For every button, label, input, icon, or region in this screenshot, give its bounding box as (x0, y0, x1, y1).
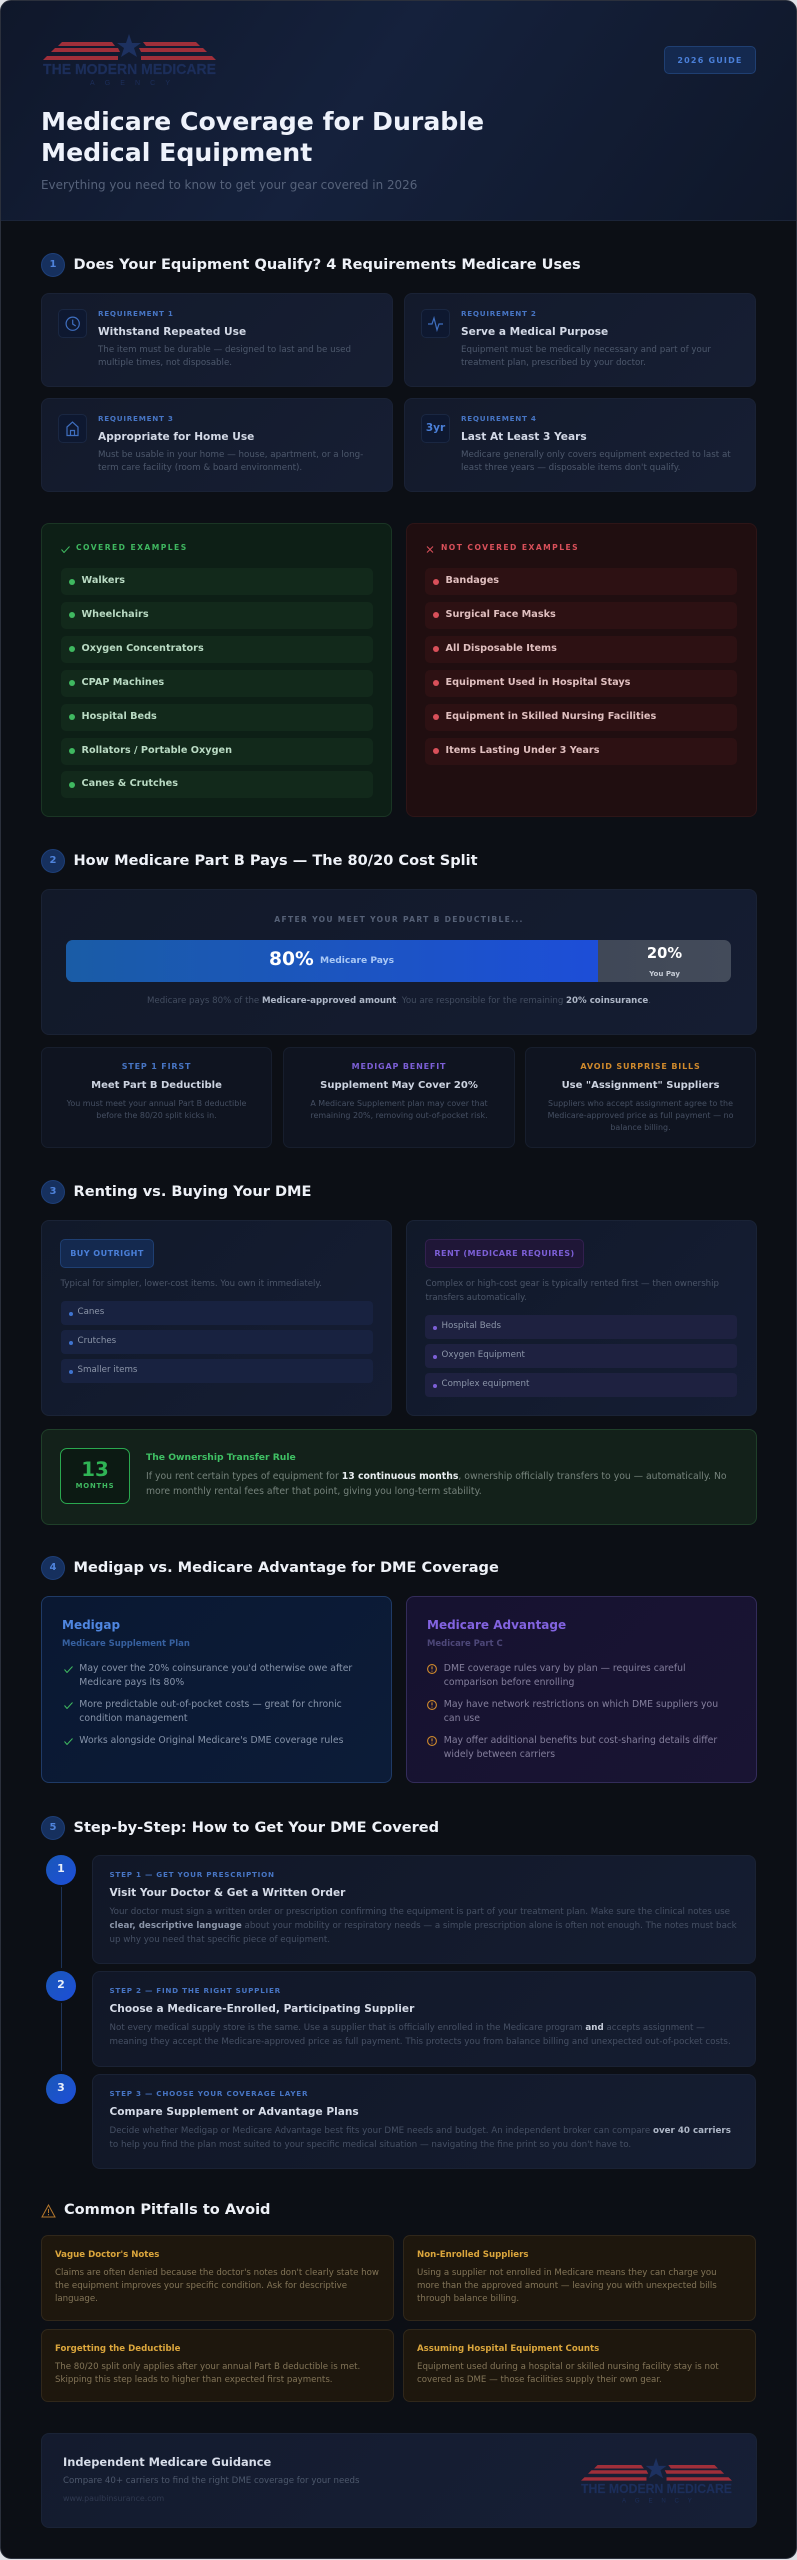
pitfall card: language. (55, 2294, 98, 2304)
rule text: more monthly rental fees after that point, giving you long-term stability. (146, 1486, 482, 1497)
requirement card 2 (404, 293, 756, 387)
title: Medicare Coverage for Durable (41, 107, 484, 136)
bar segment: 20%: 20% (647, 945, 682, 962)
list item: Hospital Beds (442, 1321, 501, 1331)
step marker 3: 3 (57, 2081, 65, 2094)
list item (61, 568, 373, 595)
step card 3: STEP 3 — CHOOSE YOUR COVERAGE LAYER (110, 2089, 308, 2098)
panel: cost split (41, 889, 757, 1035)
list item (425, 1373, 737, 1397)
section 5 heading: Step-by-Step: How to Get Your DME Covered (74, 1818, 439, 1836)
pitfall card: Claims are often denied because the doctor's notes don't clearly state how (55, 2268, 379, 2278)
list item: Oxygen Equipment (442, 1350, 525, 1360)
benefit: Works alongside Original Medicare's DME coverage rules (79, 1735, 343, 1746)
plan subtitle: Medicare Part C (427, 1638, 503, 1648)
list item: CPAP Machines (82, 677, 164, 688)
footer title: Independent Medicare Guidance (63, 2455, 271, 2469)
list item (425, 1344, 737, 1368)
card: avoid surprise bills: Suppliers who accept assignment agree to the (548, 1099, 733, 1108)
badge: 2026 guide: 2026 GUIDE (677, 56, 743, 65)
list item (425, 670, 737, 697)
section 4 heading: Medigap vs. Medicare Advantage for DME Coverage (74, 1559, 499, 1576)
step card 1: up why you need that specific piece of equipment. (110, 1935, 330, 1945)
section 4 heading: 4 (50, 1562, 56, 1573)
section 1 heading (41, 253, 581, 277)
title (41, 107, 484, 167)
section 2 heading: How Medicare Part B Pays — The 80/20 Cost Split (74, 852, 478, 869)
pitfall card: Skipping this step leads to higher than expected first payments. (55, 2374, 333, 2384)
step marker 2 (46, 1971, 76, 2001)
badge: rent: RENT (MEDICARE REQUIRES) (434, 1248, 575, 1258)
pitfall card (403, 2329, 756, 2402)
benefit: May cover the 20% coinsurance you'd otherwise owe after (79, 1663, 352, 1674)
pitfall card: Assuming Hospital Equipment Counts (417, 2344, 599, 2354)
list item: Hospital Beds (82, 711, 157, 722)
caveat: DME coverage rules vary by plan — requires careful (444, 1663, 686, 1674)
panel: buy outright (41, 1220, 392, 1416)
pitfall card: Using a supplier not enrolled in Medicare means they can charge you (417, 2268, 717, 2278)
card: medigap benefit: MEDIGAP BENEFIT (352, 1062, 446, 1071)
requirement card 3: REQUIREMENT 3 (98, 414, 174, 423)
list item (61, 704, 373, 731)
requirement card 3 (41, 398, 393, 492)
plan title: Medicare Advantage (427, 1618, 566, 1632)
heading: common pitfalls: Common Pitfalls to Avoid (64, 2201, 270, 2218)
pitfall card (41, 2329, 394, 2402)
panel: not covered examples (406, 523, 757, 817)
check (64, 1738, 73, 1745)
title: Medical Equipment (41, 138, 312, 167)
caveat: can use (444, 1713, 480, 1724)
list item (61, 602, 373, 629)
requirement card 1: The item must be durable — designed to last and be used (98, 344, 351, 354)
requirement card 1: Withstand Repeated Use (98, 326, 246, 338)
pitfall card (41, 2235, 394, 2321)
step card 2: Not every medical supply store is the same. Use a supplier that is officially enrolled in the Medicare program and accepts assignment — (110, 2023, 705, 2033)
requirement card 2: Equipment must be medically necessary and part of your (461, 344, 711, 354)
step card 1: STEP 1 — GET YOUR PRESCRIPTION (110, 1870, 275, 1879)
requirement card 4 (404, 398, 756, 492)
footer url: www.paulbinsurance.com (63, 2494, 164, 2503)
step card 2: Choose a Medicare-Enrolled, Participating Supplier (110, 2002, 414, 2014)
requirement card 1: multiple times, not disposable. (98, 358, 232, 368)
list item (425, 1315, 737, 1339)
section 3 heading: Renting vs. Buying Your DME (74, 1183, 311, 1200)
list item (61, 1359, 373, 1383)
bar segment: 20%: You Pay (649, 969, 680, 978)
list item (61, 771, 373, 798)
header band (0, 0, 797, 221)
pitfall card: the equipment improves your specific condition. Ask for descriptive (55, 2280, 347, 2290)
panel: covered examples (41, 523, 392, 817)
list item (61, 1301, 373, 1325)
list item: Bandages (446, 575, 499, 586)
list item: Rollators / Portable Oxygen (82, 744, 232, 756)
subtitle: Everything you need to know to get your gear covered in 2026 (41, 178, 417, 192)
benefit (79, 1663, 352, 1688)
footer subtitle: Compare 40+ carriers to find the right DME coverage for your needs (63, 2476, 360, 2486)
timeline connector (61, 2003, 62, 2071)
icon: check (61, 546, 70, 553)
pitfall card: Non-Enrolled Suppliers (417, 2250, 528, 2260)
stacked bar: 80/20 (66, 940, 731, 982)
list item (61, 670, 373, 697)
list item: Complex equipment (442, 1379, 529, 1389)
list item: Equipment in Skilled Nursing Facilities (446, 711, 656, 722)
pitfall card: more than the approved amount — leaving you with unexpected bills (417, 2280, 717, 2290)
13 months badge: 13 (81, 1458, 109, 1480)
card: step 1 first: STEP 1 FIRST (122, 1062, 191, 1071)
plan title: Medigap (62, 1618, 120, 1632)
section 4 heading (41, 1556, 499, 1580)
caveat (444, 1699, 718, 1724)
list item (425, 636, 737, 663)
card: medigap benefit: Supplement May Cover 20% (320, 1080, 478, 1091)
heading: not covered: NOT COVERED EXAMPLES (441, 543, 579, 552)
13 months badge (60, 1448, 130, 1504)
requirement card 4: REQUIREMENT 4 (461, 414, 537, 423)
check (64, 1702, 73, 1709)
step marker 2: 2 (57, 1978, 65, 1991)
card: medigap benefit (283, 1047, 515, 1148)
step card 2: meaning they accept the Medicare-approved price as full payment. This protects you from balance billing and unexpected out-of-pocket costs. (110, 2037, 731, 2047)
requirement card 4: Last At Least 3 Years (461, 431, 587, 443)
rule text: If you rent certain types of equipment for 13 continuous months, ownership officially transfers to you — automatically. No (146, 1471, 727, 1482)
list item: Equipment Used in Hospital Stays (446, 677, 630, 688)
section 5 heading (41, 1816, 439, 1840)
description (426, 1279, 719, 1303)
card: avoid surprise bills (525, 1047, 756, 1148)
plan subtitle: Medicare Supplement Plan (62, 1638, 190, 1648)
description: Typical for simpler, lower-cost items. You own it immediately. (60, 1279, 322, 1289)
list item: Items Lasting Under 3 Years (446, 744, 599, 756)
card: step 1 first: before the 80/20 split kicks in. (96, 1111, 217, 1120)
panel: rent (406, 1220, 757, 1416)
caveat: May offer additional benefits but cost-sharing details differ (444, 1735, 717, 1746)
logo: The Modern Medicare Agency (43, 34, 216, 87)
warning (427, 1736, 437, 1746)
step card 1: Your doctor must sign a written order or prescription confirming the equipment is part of your treatment plan. Make sure the clinical notes use (110, 1907, 730, 1917)
card: avoid surprise bills: AVOID SURPRISE BILLS (580, 1062, 701, 1071)
list item (425, 568, 737, 595)
icon: clock (58, 309, 87, 338)
list item (425, 738, 737, 764)
badge: buy: BUY OUTRIGHT (70, 1248, 144, 1258)
logo: The Modern Medicare Agency: AGENCY (90, 80, 170, 87)
list item (61, 738, 373, 764)
list item: Crutches (78, 1336, 116, 1346)
requirement card 3: term care facility (room & board environment). (98, 462, 302, 472)
card: step 1 first (41, 1047, 272, 1148)
card: step 1 first: You must meet your annual Part B deductible (67, 1099, 246, 1108)
requirement card 2: Serve a Medical Purpose (461, 326, 608, 338)
pitfall card (403, 2235, 756, 2321)
list item (425, 602, 737, 629)
pitfall card: covered as DME — those facilities supply their own gear. (417, 2374, 662, 2384)
list item: Wheelchairs (82, 609, 149, 620)
list item: Oxygen Concentrators (82, 643, 204, 654)
list item: All Disposable Items (446, 643, 557, 654)
icon: pulse (421, 309, 450, 338)
section 2 heading: 2 (50, 855, 56, 866)
icon: 3yr (421, 414, 450, 443)
card: medigap benefit: remaining 20%, removing out-of-pocket risk. (310, 1111, 488, 1120)
section 2 heading (41, 849, 478, 873)
panel: medigap (41, 1596, 392, 1783)
step card 3: Compare Supplement or Advantage Plans (110, 2106, 359, 2118)
timeline connector (61, 1887, 62, 1968)
description: Complex or high-cost gear is typically rented first — then ownership (426, 1279, 719, 1289)
warning (427, 1664, 437, 1674)
card: medigap benefit: A Medicare Supplement plan may cover that (310, 1099, 488, 1108)
icon: 3yr: 3yr (426, 422, 445, 434)
note: Medicare pays 80% of the Medicare-approved amount. You are responsible for the remaining 20% coinsurance. (147, 996, 651, 1006)
caveat (444, 1735, 718, 1760)
list item: Canes (78, 1307, 104, 1317)
requirement card 2: REQUIREMENT 2 (461, 309, 537, 318)
list item: Surgical Face Masks (446, 609, 556, 620)
list item: Walkers (82, 575, 125, 586)
pitfall card: through balance billing. (417, 2294, 519, 2304)
benefit: Medicare pays its 80% (79, 1677, 184, 1688)
bar segment: 80%: Medicare Pays (320, 956, 394, 966)
requirement card 3: Appropriate for Home Use (98, 431, 254, 443)
step marker 1: 1 (57, 1862, 65, 1875)
step card 1: clear, descriptive language about your mobility or respiratory needs — a simple prescription alone is often not enough. The notes must back (110, 1921, 737, 1931)
bar segment: 80% (66, 940, 598, 982)
caveat (444, 1663, 686, 1688)
section 3 heading (41, 1180, 311, 1204)
list item (61, 636, 373, 663)
rule title: The Ownership Transfer Rule (146, 1452, 296, 1463)
section 1 heading: 1 (50, 259, 56, 270)
caveat: widely between carriers (444, 1749, 555, 1760)
requirement card 2: treatment plan, prescribed by your doctor. (461, 358, 646, 368)
pitfall card: Forgetting the Deductible (55, 2344, 180, 2354)
step card 1: Visit Your Doctor & Get a Written Order (110, 1886, 345, 1898)
step card 2 (92, 1971, 756, 2067)
warning (427, 1700, 437, 1710)
footer panel (41, 2433, 757, 2528)
bar segment: 80%: 80% (269, 949, 314, 970)
list item: Smaller items (78, 1365, 137, 1375)
section 1 heading: Does Your Equipment Qualify? 4 Requirements Medicare Uses (74, 256, 581, 273)
requirement card 1 (41, 293, 393, 387)
icon: cross (426, 546, 434, 553)
step card 3 (92, 2074, 756, 2169)
description: transfers automatically. (426, 1293, 527, 1303)
badge: rent (425, 1239, 584, 1268)
13 months badge: MONTHS (76, 1482, 114, 1490)
rule text (146, 1471, 727, 1497)
benefit (79, 1699, 342, 1724)
panel: medicare advantage (406, 1596, 757, 1783)
step marker 1 (46, 1855, 76, 1885)
requirement card 4: Medicare generally only covers equipment expected to last at (461, 450, 731, 460)
step card 1 (92, 1855, 756, 1964)
icon: house (58, 414, 87, 443)
badge: 2026 guide (664, 46, 756, 74)
requirement card 3: Must be usable in your home — house, apartment, or a long- (98, 450, 363, 460)
pitfall card: Vague Doctor's Notes (55, 2250, 159, 2260)
callout: ownership transfer rule (41, 1429, 757, 1525)
badge: buy (60, 1239, 154, 1268)
requirement card 1: REQUIREMENT 1 (98, 309, 174, 318)
section 5 heading: 5 (50, 1822, 56, 1832)
card: avoid surprise bills: Medicare-approved price as full payment — no (548, 1111, 733, 1120)
bar segment: 20% (647, 945, 682, 978)
pitfall card: The 80/20 split only applies after your annual Part B deductible is met. (55, 2362, 360, 2372)
list item (61, 1330, 373, 1354)
card: avoid surprise bills: Use "Assignment" Suppliers (562, 1080, 719, 1091)
card: step 1 first: Meet Part B Deductible (91, 1080, 222, 1091)
requirement card 4: least three years — disposable items don't qualify. (461, 462, 680, 472)
step card 3: Decide whether Medigap or Medicare Advantage best fits your DME needs and budget. An independent broker can compare over 40 carriers (110, 2126, 731, 2136)
card: avoid surprise bills: balance billing. (610, 1123, 671, 1132)
list item: Canes & Crutches (82, 778, 178, 789)
step card 2: STEP 2 — FIND THE RIGHT SUPPLIER (110, 1986, 281, 1995)
caveat: comparison before enrolling (444, 1677, 574, 1688)
pitfall card: Equipment used during a hospital or skilled nursing facility stay is not (417, 2362, 719, 2372)
benefit: More predictable out-of-pocket costs — great for chronic (79, 1699, 342, 1710)
caveat: May have network restrictions on which DME suppliers you (444, 1699, 718, 1710)
benefit: condition management (79, 1713, 188, 1724)
check (64, 1666, 73, 1673)
caption: AFTER YOU MEET YOUR PART B DEDUCTIBLE... (274, 915, 524, 924)
list item (425, 704, 737, 731)
section 3 heading: 3 (50, 1186, 56, 1197)
icon: warning triangle (41, 2204, 56, 2218)
step card 3: to help you find the plan most suited to your specific medical situation — navigating the fine print so you don't have to. (110, 2140, 631, 2150)
step marker 3 (46, 2074, 76, 2104)
heading: covered: COVERED EXAMPLES (76, 543, 188, 552)
footer logo (581, 2458, 732, 2502)
